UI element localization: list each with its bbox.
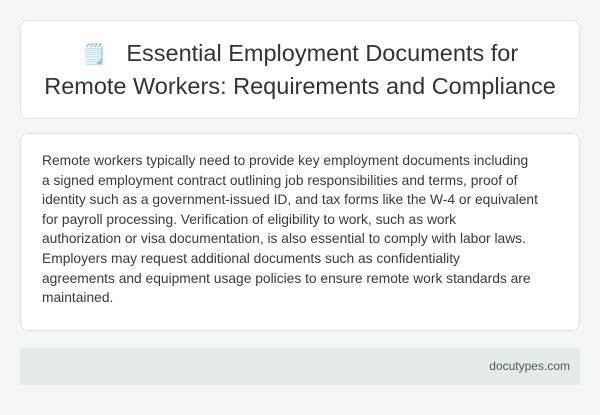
text block: agreements and equipment usage policies to ensure remote work standards are (42, 271, 531, 286)
footer text: docutypes.com (489, 359, 570, 373)
heading: Remote Workers: Requirements and Compliance (44, 72, 556, 98)
heading (44, 40, 556, 99)
text block: Remote workers typically need to provide key employment documents including (42, 153, 528, 168)
text block: a signed employment contract outlining job responsibilities and terms, proof of (42, 173, 517, 188)
text block: identity such as a government-issued ID, and tax forms like the W-4 or equivalent (42, 192, 538, 207)
text block: authorization or visa documentation, is also essential to comply with labor laws. (42, 231, 526, 246)
heading: 🗒️ Essential Employment Documents for (82, 40, 518, 66)
panel: description (20, 133, 580, 331)
text block: Employers may request additional documents such as confidentiality (42, 251, 460, 266)
title card (20, 20, 580, 119)
footer (20, 348, 580, 385)
text block (42, 153, 538, 305)
text block: for payroll processing. Verification of eligibility to work, such as work (42, 212, 456, 227)
text block: maintained. (42, 290, 113, 305)
